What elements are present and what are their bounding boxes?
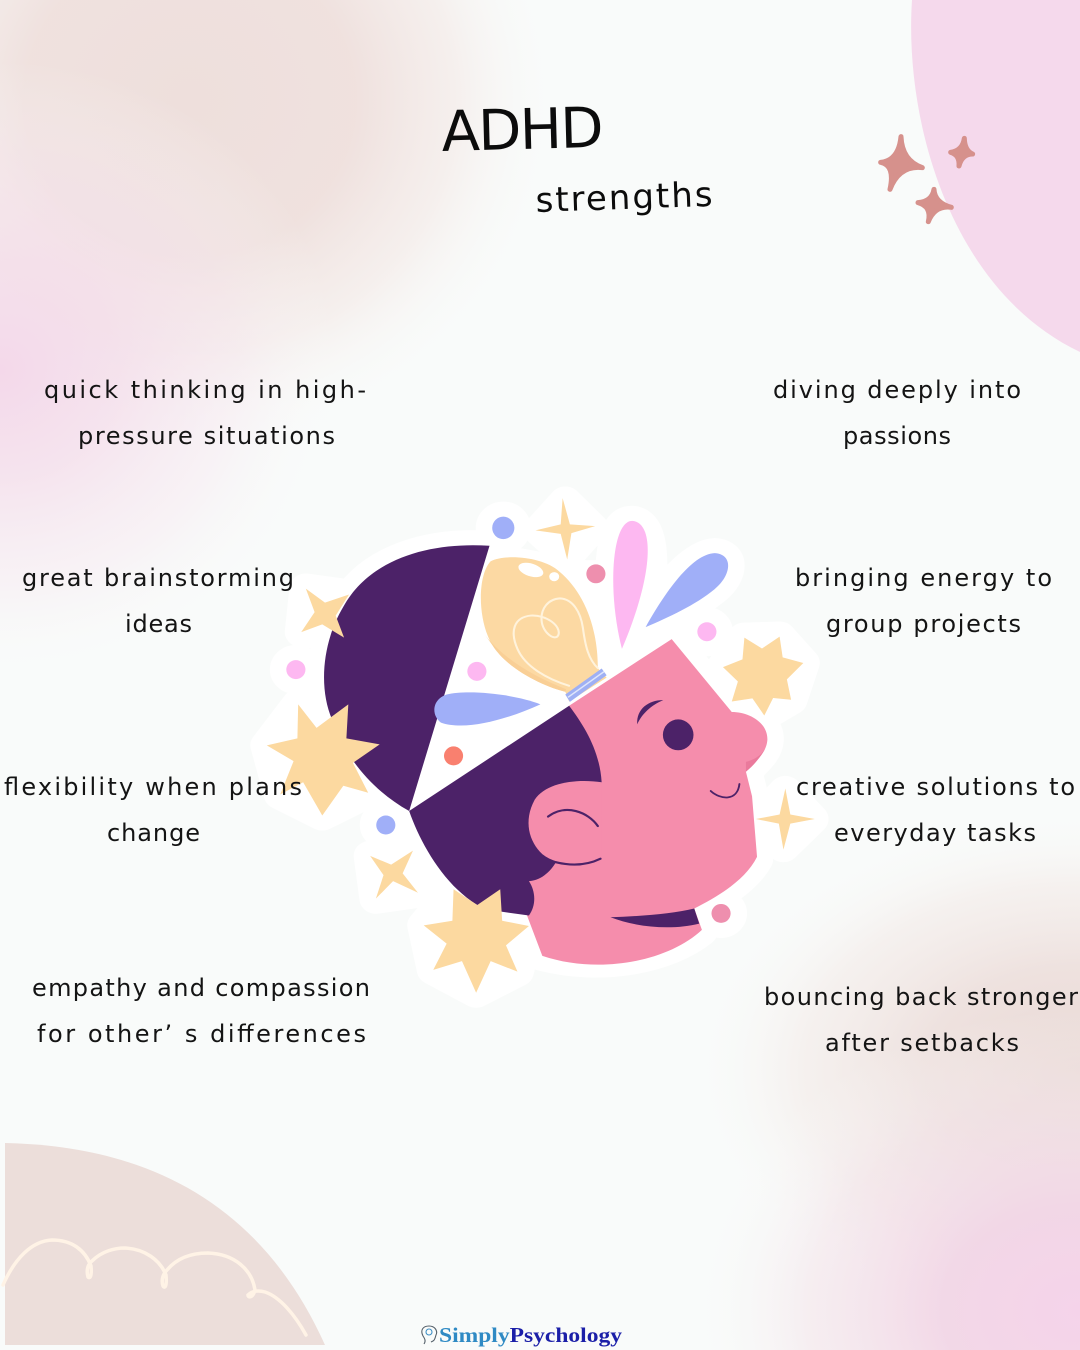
strength: brainstorming: [22, 564, 294, 638]
background glow: bottom right: [690, 810, 1080, 1350]
strength: diving deeply: passions: [843, 422, 951, 450]
eye and brow: [637, 700, 693, 750]
strength: quick thinking: quick thinking in high-: [44, 376, 366, 404]
strength: bringing energy: bringing energy to: [795, 564, 1052, 592]
strength: bouncing back: after setbacks: [825, 1029, 1019, 1057]
icon: light bulb: [481, 557, 607, 702]
sticker outline: [267, 502, 812, 993]
strength: diving deeply: [773, 376, 1021, 450]
face: [508, 639, 767, 965]
hair: top half of head: [324, 545, 490, 811]
chin shadow: [610, 909, 699, 927]
strength: bouncing back: [764, 983, 1078, 1057]
logo: SimplyPsychology: Simply Psychology: [439, 1323, 623, 1347]
strength: flexibility: [4, 773, 302, 847]
ear: [529, 781, 602, 864]
strength: flexibility: change: [107, 819, 200, 847]
strength: flexibility: flexibility when plans: [4, 773, 302, 801]
strength: empathy: for other’ s differences: [37, 1020, 366, 1048]
background glow: top left: [0, 0, 560, 680]
decorative beige corner shape with scalloped line: [3, 1143, 325, 1345]
strength: bringing energy: group projects: [826, 610, 1021, 638]
strength: creative solutions: everyday tasks: [834, 819, 1036, 847]
hair: lower half of head: [409, 706, 602, 916]
strength: quick thinking: [44, 376, 366, 450]
smile: [711, 784, 739, 797]
strength: diving deeply: diving deeply into: [773, 376, 1021, 404]
strength: bringing energy: [795, 564, 1052, 638]
strength: empathy: empathy and compassion: [32, 974, 370, 1002]
decorative pink corner shape: [911, 0, 1080, 352]
icon: head outline: [422, 1326, 437, 1344]
splash drops: [434, 521, 728, 726]
illustration: head with light bulb: [267, 498, 815, 993]
strength: empathy: [32, 974, 370, 1048]
strength: creative solutions: creative solutions to: [796, 773, 1075, 801]
icon: sparkles: [881, 137, 973, 222]
strength: bouncing back: bouncing back stronger: [764, 983, 1078, 1011]
strength: brainstorming: great brainstorming: [22, 564, 294, 592]
strength: creative solutions: [796, 773, 1075, 847]
strength: quick thinking: pressure situations: [78, 422, 335, 450]
stars: [267, 498, 815, 993]
confetti dots: [286, 517, 731, 923]
title: ADHD: ADHD: [441, 96, 604, 165]
lips: [746, 749, 765, 772]
subtitle: strengths: strengths: [535, 175, 713, 221]
strength: brainstorming: ideas: [125, 610, 192, 638]
